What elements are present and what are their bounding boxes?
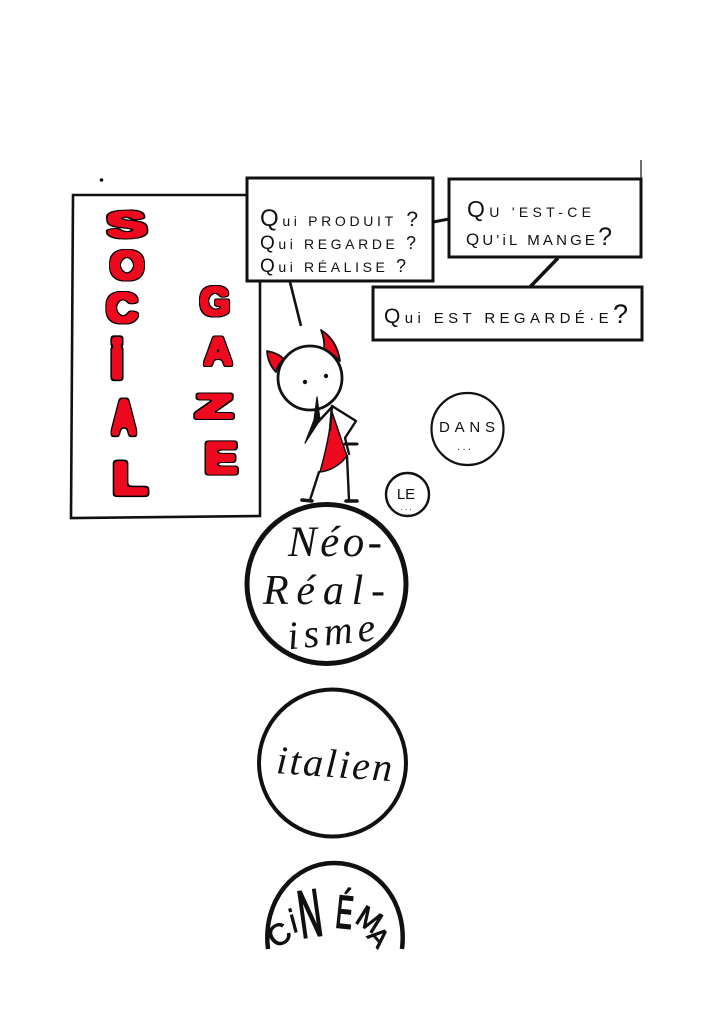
circle: dans (432, 393, 504, 465)
icon: devil horns (267, 330, 340, 372)
arc: cinéma: M (350, 900, 388, 940)
speech bubble: qui est regardé: Q ui EST REGARDÉ·E? (384, 299, 628, 329)
speech bubble: qui produit: Q ui PRODUIT ? (260, 205, 418, 232)
connectors between speech bubbles (290, 160, 641, 326)
title word: social: i (110, 329, 124, 390)
title word: gaze: E (204, 433, 238, 482)
arc: cinéma: N (293, 875, 326, 951)
arc: cinéma: A (362, 920, 396, 954)
speech bubble: qui est regardé (373, 287, 642, 340)
arc: cinéma (261, 863, 403, 955)
title word: gaze: Z (195, 387, 233, 425)
title word: social: O (110, 243, 144, 288)
speech bubble: qui produit (247, 178, 433, 281)
title word: social: C (106, 285, 138, 332)
speech bubble: qu'est-ce qu'il mange: Q U 'EST-CE (467, 196, 591, 222)
character: red devil stick figure (267, 330, 357, 501)
arc: cinéma: C (261, 915, 298, 955)
speech bubble: qu'est-ce qu'il mange: QU'iL MANGE? (466, 223, 612, 251)
circle: néo-réalisme: Réal- (262, 568, 385, 614)
infographic canvas (70, 160, 644, 950)
arc: cinéma: É (334, 885, 356, 939)
title word: social (104, 204, 149, 504)
circle: néo-réalisme: isme (285, 604, 377, 658)
circle: dans: . . . (457, 442, 471, 453)
icon: body and limbs (302, 397, 357, 501)
title word: gaze: A (204, 330, 232, 374)
icon: head (278, 346, 342, 410)
title word: social: A (112, 390, 136, 444)
circle: le: LE (397, 486, 415, 503)
speech bubble: qui produit: Q ui RÉALISE ? (260, 256, 406, 277)
circle: néo-réalisme: Néo- (287, 519, 382, 566)
circle: le (386, 473, 429, 516)
title word: social: S (104, 204, 149, 246)
title word: gaze: G (199, 280, 231, 324)
title word: gaze (195, 280, 238, 482)
circle: dans: DANS (439, 419, 495, 436)
circle: le: . . . (400, 503, 412, 512)
panel: social gaze title (71, 195, 260, 518)
arc: cinéma: i (286, 904, 301, 940)
circle: italien (259, 690, 406, 836)
speech bubble: qu'est-ce qu'il mange (449, 179, 641, 257)
circle: italien: italien (275, 737, 394, 790)
speech bubble: qui produit: Q ui REGARDE ? (260, 233, 416, 254)
title word: social: L (113, 452, 147, 504)
circle: néo-réalisme (247, 504, 406, 664)
